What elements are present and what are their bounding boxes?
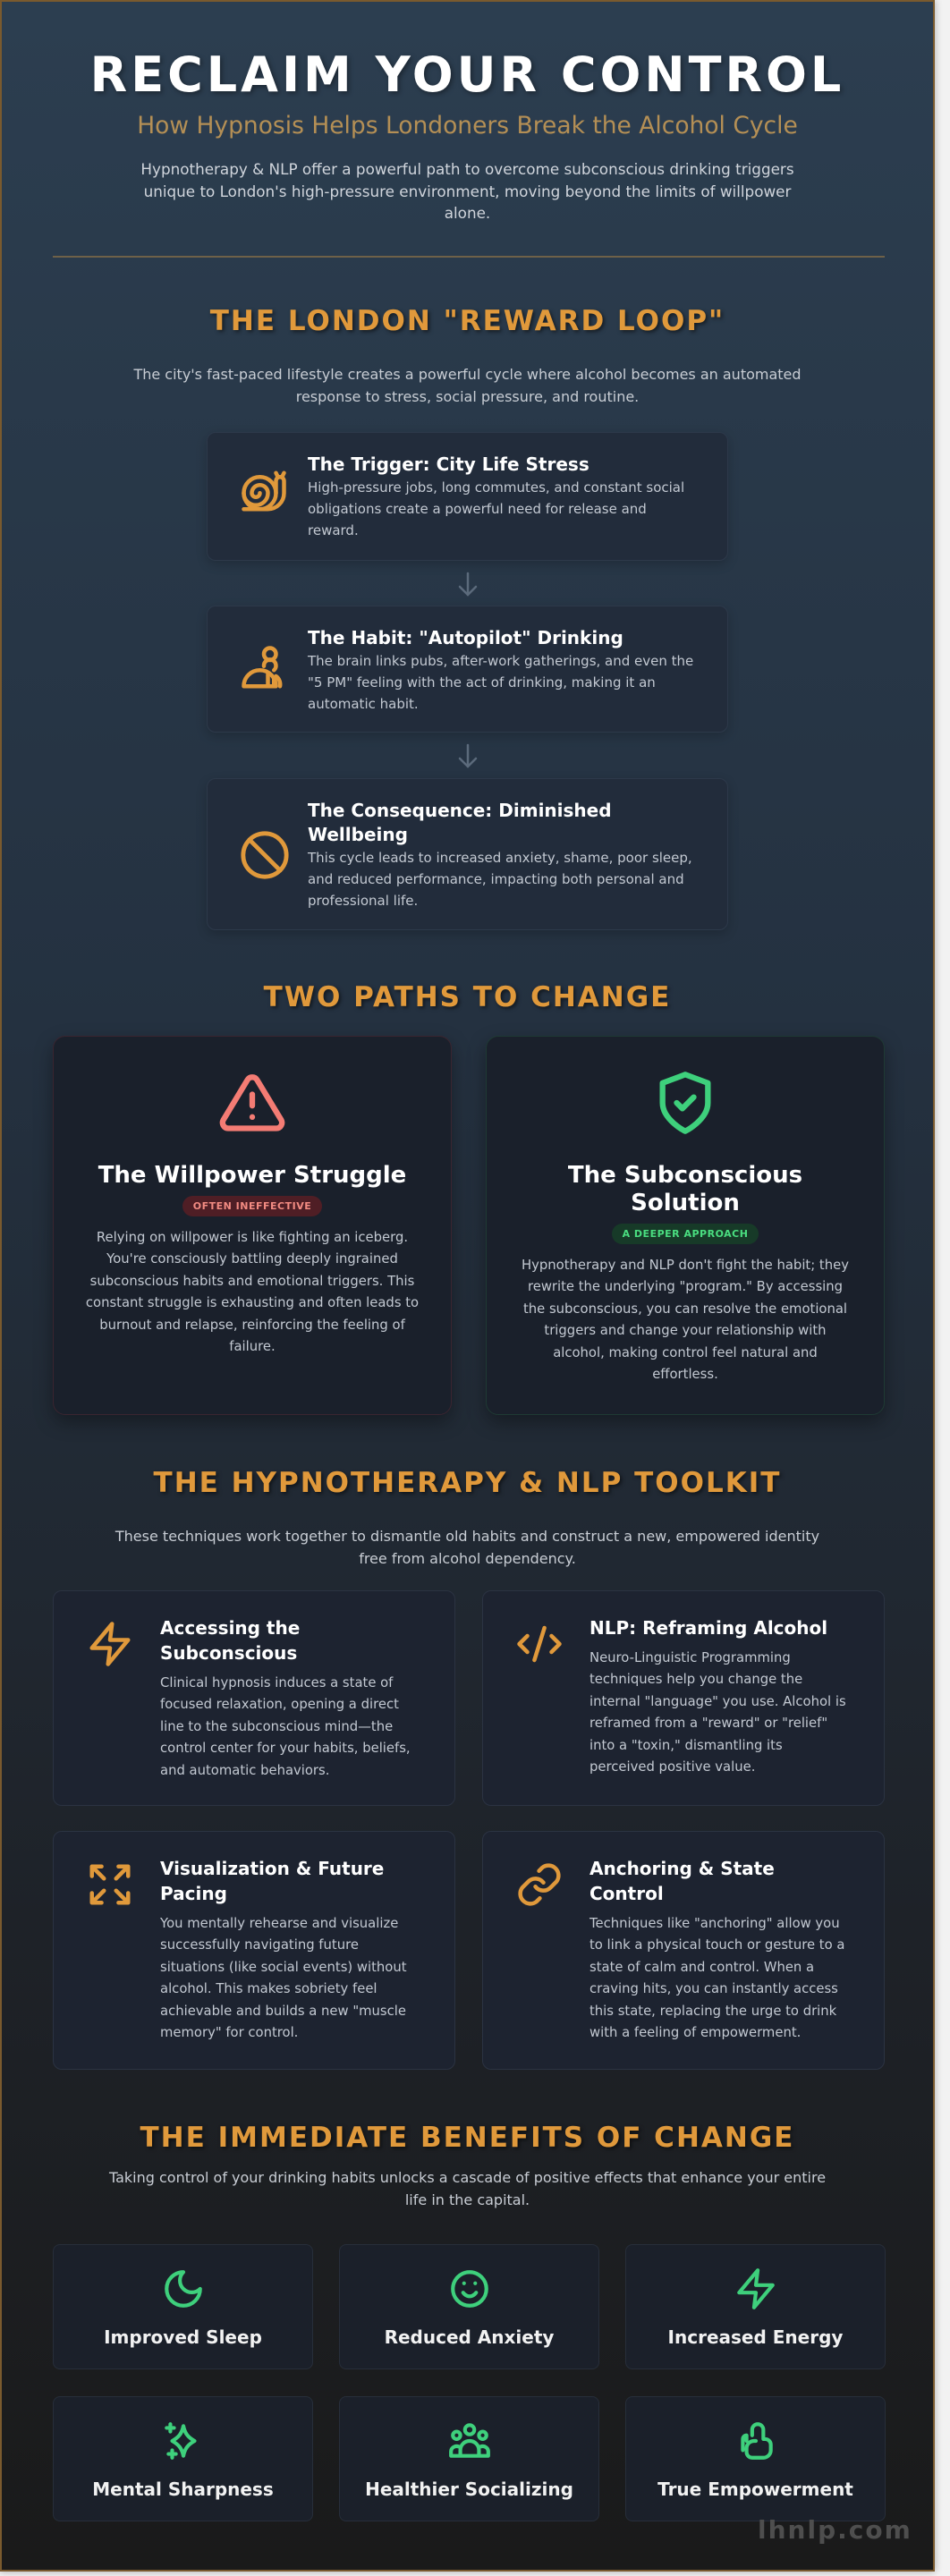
benefit: socializing: Healthier Socializing: [365, 2479, 573, 2500]
benefit: sharpness: [53, 2396, 313, 2521]
panel: subconscious: A DEEPER APPROACH: [623, 1228, 748, 1240]
text: consequence: This cycle leads to increased anxiety, shame, poor sleep, and reduced performance, impacting both personal and professional life.: [308, 850, 692, 909]
benefit: sleep: Improved Sleep: [104, 2326, 262, 2348]
panel: willpower: The Willpower Struggle: [98, 1162, 406, 1189]
card: visualization: [53, 1831, 455, 2070]
card: anchoring: [482, 1831, 885, 2070]
heading: benefits: THE IMMEDIATE BENEFITS OF CHANGE: [140, 2122, 794, 2154]
card: accessing: Accessing the Subconscious: [160, 1617, 300, 1664]
toolkit description: These techniques work together to dismantle old habits and construct a new, empowered identity free from alcohol dependency.: [115, 1528, 819, 1567]
watermark: lhnlp.com: [758, 2515, 912, 2545]
card: accessing: Clinical hypnosis induces a state of focused relaxation, opening a direct line to the subconscious mind—the control center for your habits, beliefs, and automatic behaviors.: [160, 1675, 411, 1778]
card: accessing: [53, 1590, 455, 1806]
title: RECLAIM YOUR CONTROL: [90, 47, 844, 103]
subtitle: How Hypnosis Helps Londoners Break the Alcohol Cycle: [137, 112, 798, 140]
panel: subconscious: Hypnotherapy and NLP don't fight the habit; they rewrite the underlying "program." By accessing the subconscious, you can resolve the emotional triggers and change your relationship with alcohol, making control feel natural and effortless.: [522, 1258, 849, 1382]
card: consequence: [207, 778, 728, 930]
text: trigger: [308, 453, 684, 538]
icon: habit: [242, 646, 283, 689]
benefit: empowerment: True Empowerment: [657, 2479, 853, 2500]
heading: london reward loop: THE LONDON "REWARD LOOP": [210, 305, 725, 337]
icon: zap: [89, 1622, 131, 1666]
icon: code: [517, 1626, 562, 1662]
icon: snail: [242, 470, 286, 512]
benefit: anxiety: Reduced Anxiety: [385, 2326, 554, 2348]
card: visualization: You mentally rehearse and visualize successfully navigating future situations (like social events) without alcohol. This makes sobriety feel achievable and builds a new "muscle memory" for control.: [160, 1916, 407, 2040]
benefit: empowerment: [625, 2396, 886, 2521]
benefit: energy: Increased Energy: [668, 2326, 843, 2348]
text: trigger: High-pressure jobs, long commutes, and constant social obligations create a powerful need for release and reward.: [308, 479, 684, 538]
intro text: Hypnotherapy & NLP offer a powerful path to overcome subconscious drinking triggers unique to London's high-pressure environment, moving beyond the limits of willpower alone.: [140, 160, 794, 222]
loop description: The city's fast-paced lifestyle creates a powerful cycle where alcohol becomes an automated response to stress, social pressure, and routine.: [133, 366, 802, 405]
card: anchoring: Techniques like "anchoring" allow you to link a physical touch or gesture to a state of calm and control. When a craving hits, you can instantly access this state, replacing the urge to drink with a feeling of empowerment.: [590, 1916, 844, 2040]
benefit: sharpness: Mental Sharpness: [92, 2479, 274, 2500]
panel: subconscious: The Subconscious Solution: [568, 1162, 802, 1216]
panel: willpower: Relying on willpower is like fighting an iceberg. You're consciously battling deeply ingrained subconscious habits and emotional triggers. This constant struggle is exhausting and often leads to burnout and relapse, reinforcing the feeling of failure.: [86, 1230, 419, 1354]
icon: ban: [241, 831, 289, 879]
card: nlp: NLP: Reframing Alcohol: [590, 1617, 827, 1639]
benefit: sleep: [53, 2244, 313, 2369]
panel: willpower: [53, 1036, 452, 1415]
benefit: socializing: [339, 2396, 599, 2521]
icon: expand: [89, 1864, 131, 1905]
icon: shield check: [660, 1072, 710, 1134]
text: habit: The Habit: "Autopilot" Drinking: [308, 627, 623, 648]
benefit: anxiety: [339, 2244, 599, 2369]
benefits description: Taking control of your drinking habits unlocks a cascade of positive effects that enhance your entire life in the capital.: [109, 2169, 826, 2208]
benefit: energy: [625, 2244, 886, 2369]
panel: willpower: OFTEN INEFFECTIVE: [193, 1200, 311, 1212]
card: nlp: [482, 1590, 885, 1806]
heading: toolkit: THE HYPNOTHERAPY & NLP TOOLKIT: [154, 1467, 781, 1499]
icon: link: [518, 1863, 561, 1906]
text: habit: [308, 627, 693, 712]
text: consequence: [308, 800, 692, 909]
card: anchoring: Anchoring & State Control: [590, 1858, 775, 1904]
card: trigger: [207, 432, 728, 561]
text: habit: The brain links pubs, after-work gatherings, and even the "5 PM" feeling with the act of drinking, making it an automatic habit.: [308, 653, 693, 712]
card: habit: [207, 606, 728, 733]
panel: subconscious: [486, 1036, 885, 1415]
card: visualization: Visualization & Future Pacing: [160, 1858, 384, 1904]
arrow: [458, 744, 478, 767]
text: trigger: The Trigger: City Life Stress: [308, 453, 590, 475]
arrow: [458, 572, 478, 596]
heading: two paths: TWO PATHS TO CHANGE: [264, 981, 671, 1013]
card: nlp: Neuro-Linguistic Programming techniques help you change the internal "language" you use. Alcohol is reframed from a "reward" or "relief" into a "toxin," dismantling its perceived positive value.: [590, 1650, 846, 1775]
icon: warning: [220, 1074, 284, 1131]
text: consequence: The Consequence: Diminished Wellbeing: [308, 800, 612, 845]
